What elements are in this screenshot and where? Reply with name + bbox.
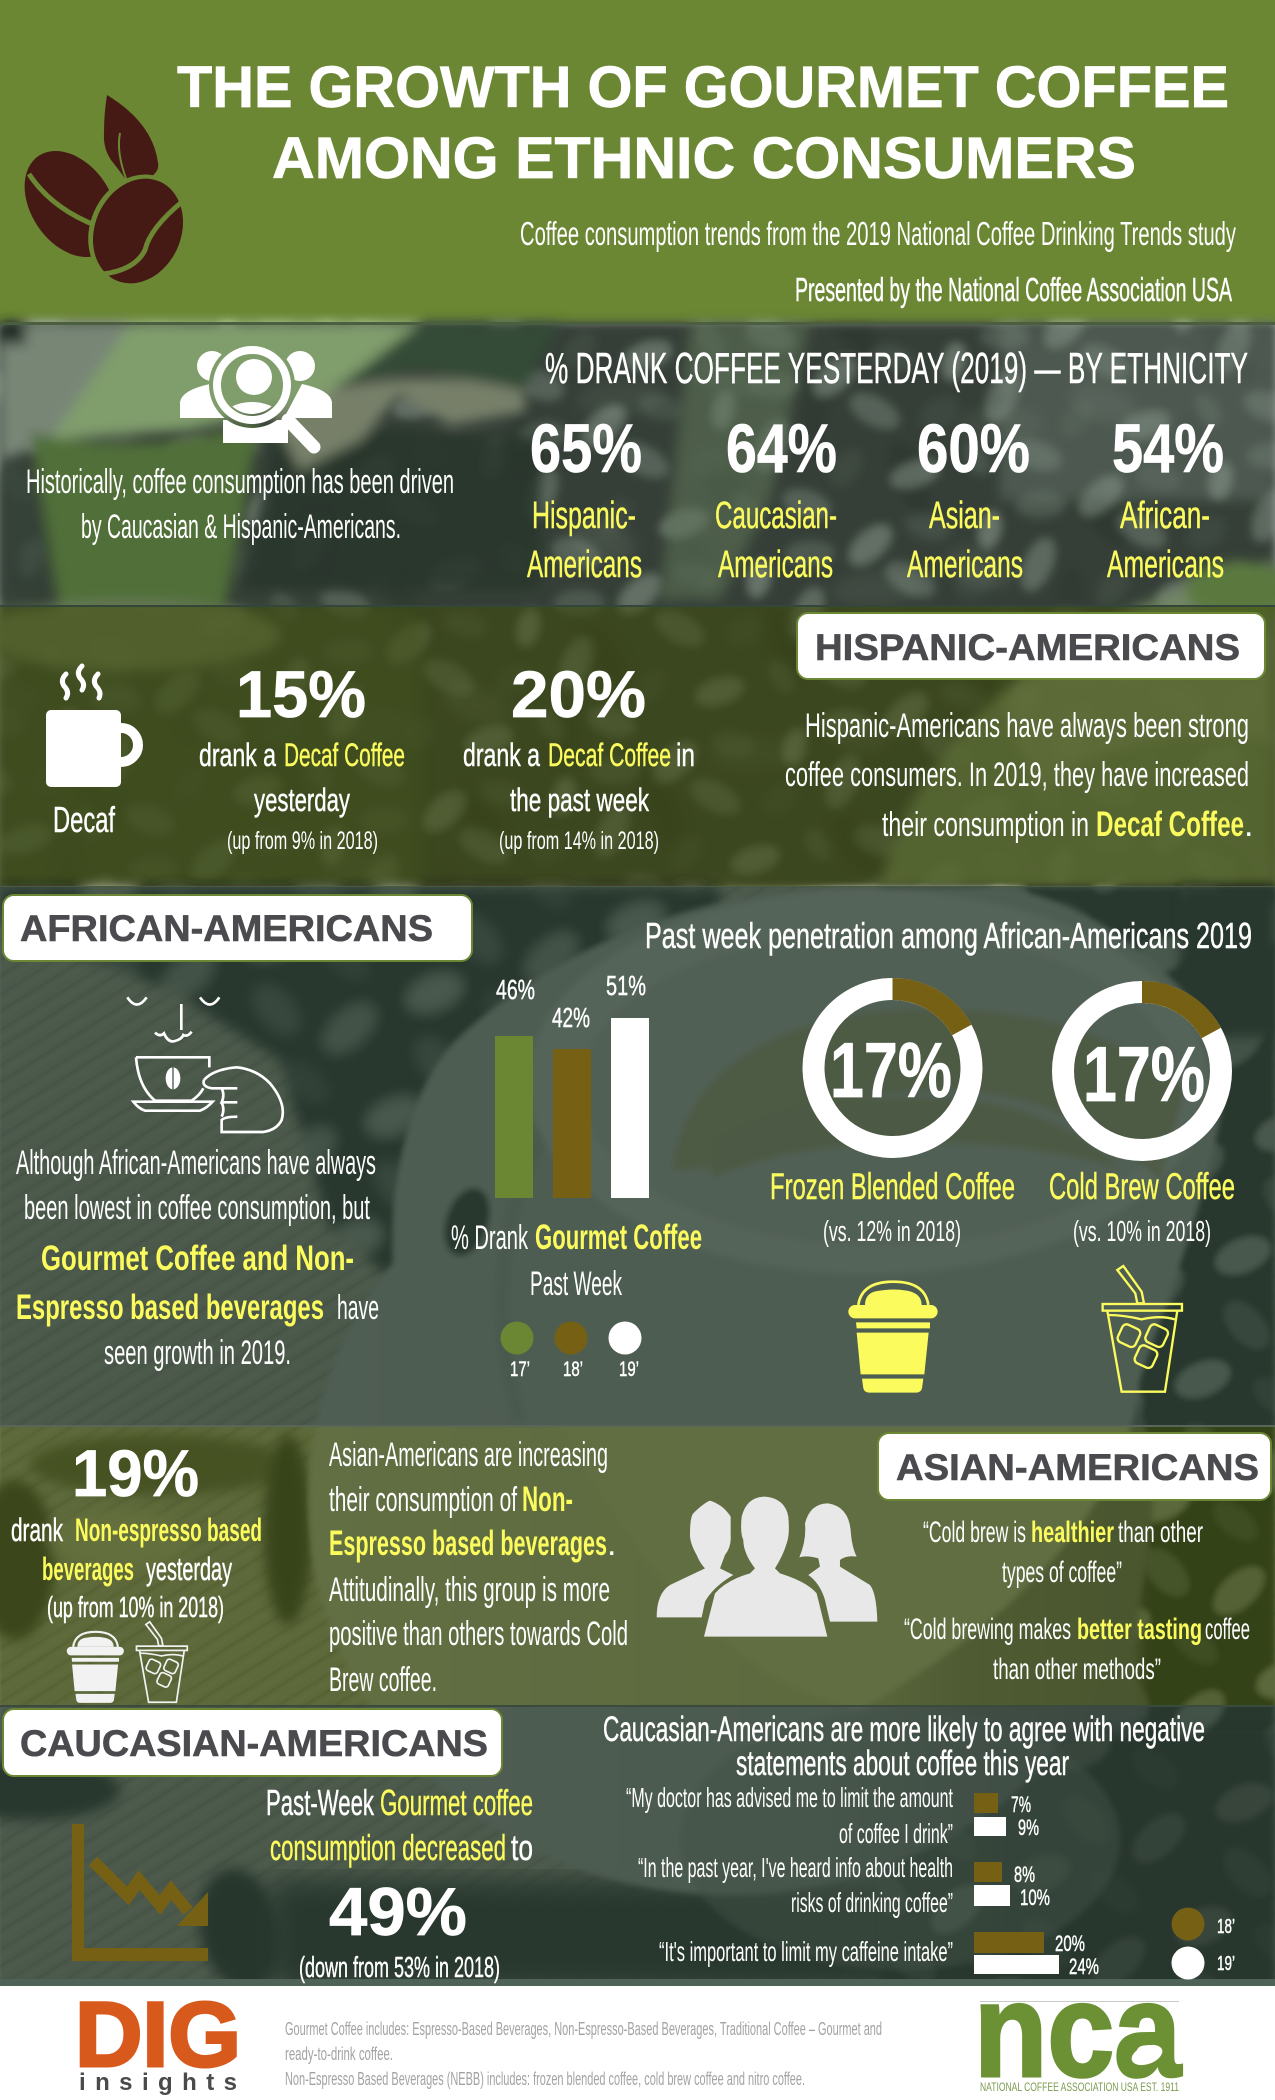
label box: asian-americans bbox=[878, 1433, 1271, 1500]
stat: hispanic bbox=[527, 410, 642, 586]
footnotes: ready-to-drink coffee. bbox=[285, 2044, 393, 2064]
label: frozen blended coffee: (vs. 12% in 2018) bbox=[823, 1216, 961, 1248]
text: asian paragraph: Attitudinally, this group is more bbox=[329, 1571, 610, 1609]
text: asian paragraph bbox=[329, 1436, 628, 1699]
logo: dig insights: insights bbox=[79, 2069, 237, 2096]
crema bbox=[672, 1009, 1185, 1180]
text: asian paragraph: their consumption of bbox=[329, 1481, 517, 1519]
stat: 20%: drank a bbox=[463, 737, 540, 773]
text: african paragraph: been lowest in coffee consumption, but bbox=[24, 1189, 370, 1227]
legend: 18 and 19: 18’ bbox=[1217, 1916, 1235, 1938]
stat: 15%: Decaf Coffee bbox=[284, 737, 405, 773]
text: hispanic paragraph: . bbox=[1244, 806, 1253, 844]
logo: nca: NATIONAL COFFEE ASSOCIATION USA EST. 1911 bbox=[980, 2080, 1179, 2094]
legend: 18 and 19 bbox=[1172, 1908, 1235, 1980]
quote: cold brew healthier: than other bbox=[1118, 1516, 1203, 1549]
stat: 19%: drank bbox=[11, 1512, 64, 1548]
panel: asian-americans bbox=[11, 1433, 1271, 1703]
heading: negative statements: statements about coffee this year bbox=[736, 1744, 1069, 1783]
quotes: negative statements: “It's important to limit my caffeine intake” bbox=[659, 1936, 953, 1967]
bar chart: agreement: 7% bbox=[1011, 1792, 1031, 1817]
stat: asian: 60% bbox=[917, 410, 1030, 487]
stat: 49% bbox=[299, 1874, 500, 1984]
quote: cold brew healthier: types of coffee” bbox=[1002, 1556, 1122, 1589]
icon: frozen cup bbox=[848, 1282, 938, 1393]
section tint: asian bbox=[0, 1426, 1275, 1706]
footnotes: Non-Espresso Based Beverages (NEBB) includes: frozen blended coffee, cold brew coffee and nitro coffee. bbox=[285, 2069, 805, 2089]
text: hispanic paragraph: their consumption in bbox=[882, 806, 1089, 844]
stat: 20%: Decaf Coffee bbox=[548, 737, 671, 773]
stat: 19%: 19% bbox=[72, 1436, 199, 1510]
icon: cold brew cup bbox=[1103, 1266, 1182, 1392]
section tint: ethnicity overview bbox=[0, 324, 1275, 607]
chart caption: Past Week bbox=[530, 1265, 623, 1303]
text: african paragraph: have bbox=[337, 1289, 379, 1327]
bar chart: agreement: 8% bbox=[1014, 1862, 1035, 1887]
label box: asian-americans: ASIAN-AMERICANS bbox=[896, 1447, 1259, 1488]
chart caption: Gourmet Coffee bbox=[535, 1218, 702, 1257]
stat: asian bbox=[907, 410, 1030, 586]
subtitle bbox=[520, 215, 1236, 308]
stat: 19%: (up from 10% in 2018) bbox=[47, 1592, 224, 1624]
text: past-week gourmet: Past-Week bbox=[266, 1782, 375, 1823]
quote: better tasting: “Cold brewing makes bbox=[904, 1613, 1071, 1646]
stat: caucasian: 64% bbox=[726, 410, 837, 487]
label: cold brew coffee bbox=[1049, 1166, 1235, 1248]
stat: hispanic: 65% bbox=[530, 410, 642, 487]
label: frozen blended coffee bbox=[770, 1166, 1015, 1248]
logo: dig insights: DIG bbox=[75, 1984, 241, 2086]
quotes: negative statements: “My doctor has advised me to limit the amount bbox=[626, 1782, 953, 1813]
icon: frozen cup white bbox=[67, 1632, 124, 1703]
stat: 49%: (down from 53% in 2018) bbox=[299, 1952, 500, 1984]
stat: asian: Americans bbox=[907, 544, 1023, 586]
label box: caucasian-americans bbox=[3, 1709, 502, 1776]
stat: 15% bbox=[199, 657, 405, 855]
chart caption bbox=[451, 1218, 702, 1303]
panel: african-americans bbox=[3, 895, 1252, 1393]
section tint: caucasian bbox=[0, 1706, 1275, 1979]
text: asian paragraph: Espresso based beverages bbox=[329, 1524, 607, 1563]
text: asian paragraph: positive than others towards Cold bbox=[329, 1615, 628, 1653]
icon: people under magnifier bbox=[180, 350, 332, 454]
background photo: leaves and coffee beans bbox=[0, 323, 1275, 887]
icon: three people bbox=[657, 1497, 877, 1637]
text: historically: by Caucasian & Hispanic-Americans. bbox=[81, 508, 401, 546]
bar chart: agreement: 10% bbox=[1020, 1885, 1050, 1910]
donut: frozen blended coffee: 17% bbox=[830, 1026, 952, 1114]
icon: decaf mug bbox=[46, 666, 138, 787]
quote: cold brew healthier: “Cold brew is bbox=[923, 1516, 1026, 1549]
stat: caucasian: Americans bbox=[718, 544, 833, 586]
icon: face smelling coffee bbox=[127, 997, 283, 1132]
panel: hispanic-americans bbox=[46, 613, 1265, 855]
quote: better tasting: better tasting bbox=[1077, 1613, 1202, 1646]
legend: years: 17’ bbox=[510, 1358, 530, 1381]
stat: 20%: in bbox=[676, 737, 695, 773]
stat: african bbox=[1107, 410, 1224, 586]
title bbox=[177, 55, 1229, 191]
stat: 19%: yesterday bbox=[146, 1551, 232, 1587]
text: historically: Historically, coffee consumption has been driven bbox=[26, 463, 454, 501]
stat: 20%: 20% bbox=[511, 657, 646, 731]
text: african paragraph: Although African-Americans have always bbox=[16, 1144, 376, 1182]
label box: hispanic-americans bbox=[797, 613, 1265, 679]
legend: years bbox=[500, 1322, 642, 1381]
text: african paragraph: seen growth in 2019. bbox=[104, 1334, 291, 1372]
icon: cold cup white bbox=[136, 1622, 187, 1702]
bar chart: agreement: 24% bbox=[1069, 1954, 1099, 1979]
panel: caucasian-americans bbox=[3, 1709, 1235, 1984]
label box: caucasian-americans: CAUCASIAN-AMERICANS bbox=[20, 1723, 488, 1764]
label box: hispanic-americans: HISPANIC-AMERICANS bbox=[815, 627, 1240, 668]
stat: 15%: drank a bbox=[199, 737, 276, 773]
bar chart: agreement: 20% bbox=[1055, 1931, 1085, 1956]
bar chart: gourmet coffee past week: 46% bbox=[496, 974, 535, 1005]
text: african paragraph: Gourmet Coffee and Non- bbox=[41, 1239, 354, 1278]
text: past-week gourmet: Gourmet coffee bbox=[380, 1782, 533, 1823]
stat: 15%: (up from 9% in 2018) bbox=[227, 827, 378, 855]
heading: negative statements bbox=[603, 1710, 1205, 1783]
donut: cold brew coffee bbox=[1063, 992, 1221, 1150]
section tint: hispanic bbox=[0, 607, 1275, 887]
stat: 15%: 15% bbox=[236, 657, 366, 731]
bar chart: agreement: 9% bbox=[1018, 1815, 1039, 1840]
text: african paragraph bbox=[16, 1144, 379, 1372]
stat: 19%: beverages bbox=[42, 1551, 134, 1587]
quotes: negative statements: risks of drinking coffee” bbox=[791, 1887, 953, 1918]
title: AMONG ETHNIC CONSUMERS bbox=[272, 126, 1136, 191]
panel: ethnicity overview bbox=[26, 344, 1248, 586]
quotes: negative statements: “In the past year, I've heard info about health bbox=[638, 1852, 953, 1883]
saucer bbox=[308, 1105, 1152, 1895]
stat: caucasian bbox=[715, 410, 837, 586]
chart caption: % Drank bbox=[451, 1219, 529, 1257]
label box: african-americans bbox=[3, 895, 472, 961]
stat: 20%: the past week bbox=[510, 782, 650, 818]
background photo: coffee cup on wood with beans bbox=[0, 887, 1275, 1999]
stat: hispanic: Americans bbox=[527, 544, 642, 586]
icon: declining trend chart bbox=[72, 1824, 208, 1961]
rim bbox=[528, 890, 1208, 1274]
stat: 20% bbox=[463, 657, 695, 855]
stat: 49%: 49% bbox=[329, 1874, 467, 1950]
bar chart: gourmet coffee past week: 42% bbox=[552, 1002, 590, 1033]
stat: 19%: Non-espresso based bbox=[75, 1512, 262, 1548]
foam bbox=[580, 930, 1180, 1246]
stat: asian: Asian- bbox=[929, 495, 1000, 537]
stat: hispanic: Hispanic- bbox=[532, 495, 636, 537]
text: asian paragraph: . bbox=[607, 1525, 616, 1563]
text: asian paragraph: Non- bbox=[522, 1480, 573, 1519]
quote: better tasting: than other methods” bbox=[993, 1653, 1161, 1686]
quote: better tasting bbox=[904, 1613, 1250, 1686]
text: african paragraph: Espresso based beverages bbox=[16, 1288, 324, 1327]
stat: 20%: (up from 14% in 2018) bbox=[499, 827, 659, 855]
label box: african-americans: AFRICAN-AMERICANS bbox=[20, 908, 433, 949]
icon: coffee beans and leaf bbox=[5, 95, 205, 304]
stat: 15%: yesterday bbox=[254, 782, 350, 818]
header band bbox=[0, 0, 1275, 323]
text: past-week gourmet: to bbox=[511, 1827, 533, 1868]
quote: cold brew healthier bbox=[923, 1516, 1203, 1589]
legend: years: 18’ bbox=[563, 1358, 583, 1381]
stat: caucasian: Caucasian- bbox=[715, 495, 837, 537]
text: asian paragraph: Asian-Americans are increasing bbox=[329, 1436, 608, 1474]
donut: frozen blended coffee bbox=[814, 989, 972, 1147]
footer band bbox=[0, 1986, 1275, 2100]
title: THE GROWTH OF GOURMET COFFEE bbox=[177, 55, 1229, 120]
section tint: african bbox=[0, 887, 1275, 1426]
text: past-week gourmet: consumption decreased bbox=[270, 1827, 506, 1868]
text: historically bbox=[26, 463, 454, 546]
label: frozen blended coffee: Frozen Blended Coffee bbox=[770, 1166, 1015, 1207]
bar chart: agreement bbox=[974, 1792, 1099, 1979]
bar chart: gourmet coffee past week: 51% bbox=[606, 970, 646, 1001]
stat: 19% bbox=[11, 1436, 262, 1624]
text: asian paragraph: Brew coffee. bbox=[329, 1661, 437, 1699]
footnotes bbox=[285, 2019, 882, 2089]
quote: cold brew healthier: healthier bbox=[1031, 1516, 1114, 1549]
stat: african: 54% bbox=[1112, 410, 1224, 487]
bar chart: gourmet coffee past week bbox=[495, 970, 649, 1198]
donut: cold brew coffee: 17% bbox=[1083, 1030, 1205, 1118]
footnotes: Gourmet Coffee includes: Espresso-Based Beverages, Non-Espresso-Based Beverages, Traditional Coffee – Gourmet and bbox=[285, 2019, 882, 2039]
quotes: negative statements: of coffee I drink” bbox=[839, 1818, 953, 1849]
text: hispanic paragraph bbox=[785, 707, 1253, 844]
stat: african: African- bbox=[1120, 495, 1210, 537]
legend: 18 and 19: 19’ bbox=[1217, 1953, 1235, 1975]
cup bbox=[392, 887, 1225, 1710]
legend: years: 19’ bbox=[619, 1358, 639, 1381]
label: decaf: Decaf bbox=[53, 799, 116, 840]
quotes: negative statements bbox=[626, 1782, 953, 1967]
text: past-week gourmet bbox=[266, 1782, 533, 1868]
